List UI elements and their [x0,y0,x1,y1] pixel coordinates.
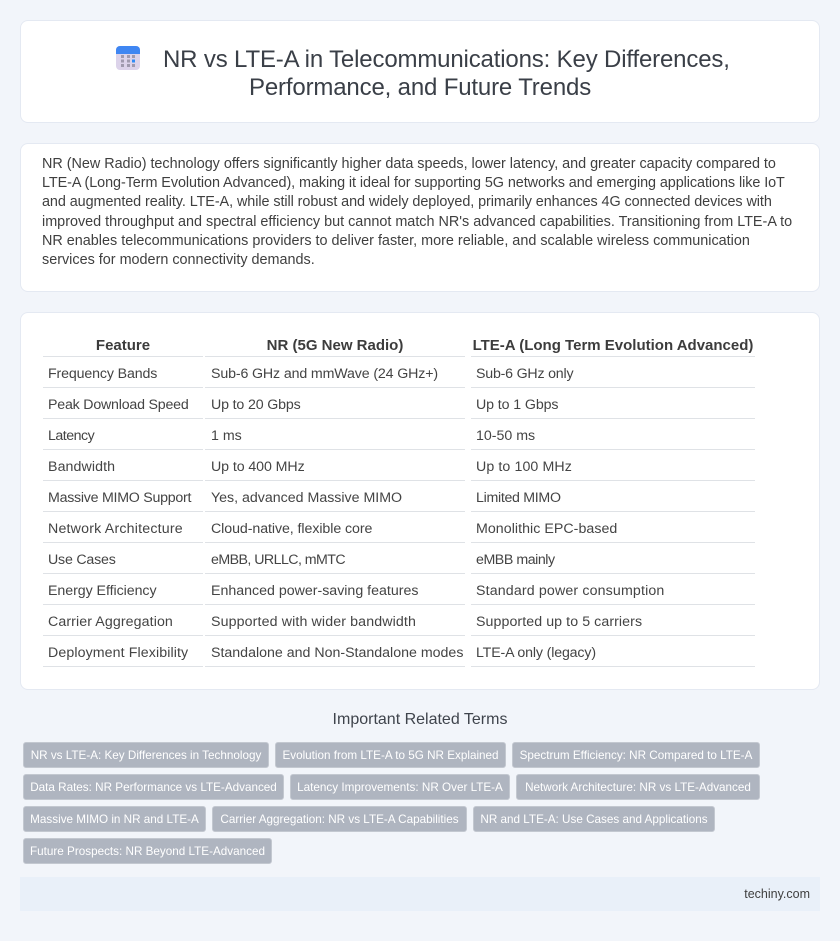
row: Network Architecture [48,521,617,537]
row: Use Cases: eMBB, URLLC, mMTC [211,552,345,568]
header: NR: NR (5G New Radio) [267,337,403,354]
row: Latency [48,428,535,444]
tag: Data Rates: NR Performance vs LTE-Advanced [30,781,277,794]
row: Carrier Aggregation: Supported up to 5 carriers [476,614,642,630]
row: Carrier Aggregation [48,614,642,630]
text block: introduction [42,156,792,268]
tag: Network Architecture: NR vs LTE-Advanced [525,781,751,794]
tag: Latency Improvements: NR Over LTE-A [297,781,503,794]
row: Peak Download Speed: Up to 20 Gbps [211,397,301,413]
footer credit: techiny.com [744,887,810,901]
row: Bandwidth: Bandwidth [48,459,115,475]
row: Deployment Flexibility: LTE-A only (legacy) [476,645,596,661]
tag: Massive MIMO in NR and LTE-A [30,813,199,826]
row: Network Architecture: Cloud-native, flexible core [211,521,372,537]
tag: Evolution from LTE-A to 5G NR Explained [282,749,499,762]
row: Frequency Bands [48,366,574,382]
row: Deployment Flexibility: Standalone and Non-Standalone modes [211,645,463,661]
row: Peak Download Speed [48,397,558,413]
text block: introduction: and augmented reality. LTE-A, while still robust and widely deployed, primarily enhances 4G connected devices with [42,194,772,210]
text block: introduction: LTE-A (Long-Term Evolution Advanced), making it ideal for supporting 5G networks and emerging applications like IoT [42,175,785,191]
row: Energy Efficiency [48,583,664,599]
tag [275,742,506,768]
comparison table [43,337,755,667]
tag: Spectrum Efficiency: NR Compared to LTE-A [520,749,752,762]
header: LTE-A: LTE-A (Long Term Evolution Advanced) [473,337,753,354]
tag [212,806,467,832]
tag: NR and LTE-A: Use Cases and Applications [480,813,708,826]
row: Massive MIMO Support [48,490,561,506]
icon: calendar grid [116,46,140,70]
title: NR vs LTE-A in Telecommunications: Key Differences, [163,46,730,73]
heading: related terms: Important Related Terms [333,711,507,728]
row: Latency: Latency [48,428,94,444]
footer bar [20,877,820,911]
row: Energy Efficiency: Enhanced power-saving features [211,583,418,599]
row: Massive MIMO Support: Massive MIMO Support [48,490,191,506]
row: Network Architecture: Monolithic EPC-based [476,521,617,537]
panel: header [20,20,820,123]
row: Massive MIMO Support: Yes, advanced Massive MIMO [211,490,402,506]
tag [516,774,760,800]
text block: introduction: NR enables telecommunications providers to deliver faster, more reliable, and scalable wireless communication [42,233,750,249]
row: Use Cases [48,552,555,568]
title [163,46,730,101]
tag [512,742,760,768]
tag: Future Prospects: NR Beyond LTE-Advanced [30,845,265,858]
related terms tags [23,742,760,864]
tag [23,806,206,832]
row: Peak Download Speed: Up to 1 Gbps [476,397,558,413]
row: Latency: 10-50 ms [476,428,535,444]
row: Carrier Aggregation: Supported with wider bandwidth [211,614,416,630]
tag: NR vs LTE-A: Key Differences in Technology [31,749,261,762]
row: Energy Efficiency: Standard power consumption [476,583,664,599]
row: Use Cases: eMBB mainly [476,552,555,568]
text block: introduction: NR (New Radio) technology offers significantly higher data speeds, lower latency, and greater capacity compared to [42,156,776,172]
row: Latency: 1 ms [211,428,242,444]
panel: introduction [20,143,820,292]
text block: introduction: improved throughput and spectral efficiency but cannot match NR's advanced capabilities. Transitioning from LTE-A to [42,214,792,230]
tag: Carrier Aggregation: NR vs LTE-A Capabilities [220,813,459,826]
row: Energy Efficiency: Energy Efficiency [48,583,157,599]
row: Bandwidth [48,459,572,475]
tag [473,806,715,832]
row: Deployment Flexibility: Deployment Flexibility [48,645,188,661]
tag [23,774,284,800]
panel: comparison table [20,312,820,690]
header: Feature: Feature [96,337,150,354]
row: Bandwidth: Up to 400 MHz [211,459,305,475]
row: Carrier Aggregation: Carrier Aggregation [48,614,173,630]
row: Deployment Flexibility [48,645,596,661]
row: Frequency Bands: Sub-6 GHz only [476,366,573,382]
row: Network Architecture: Network Architecture [48,521,183,537]
row: Use Cases: Use Cases [48,552,116,568]
row: Frequency Bands: Frequency Bands [48,366,157,382]
row: Frequency Bands: Sub-6 GHz and mmWave (24 GHz+) [211,366,438,382]
tag [23,742,269,768]
title: Performance, and Future Trends [249,74,591,101]
row: Massive MIMO Support: Limited MIMO [476,490,561,506]
tag [290,774,510,800]
tag [23,838,272,864]
row: Bandwidth: Up to 100 MHz [476,459,572,475]
row: Peak Download Speed: Peak Download Speed [48,397,189,413]
text block: introduction: services for modern connectivity demands. [42,252,315,268]
